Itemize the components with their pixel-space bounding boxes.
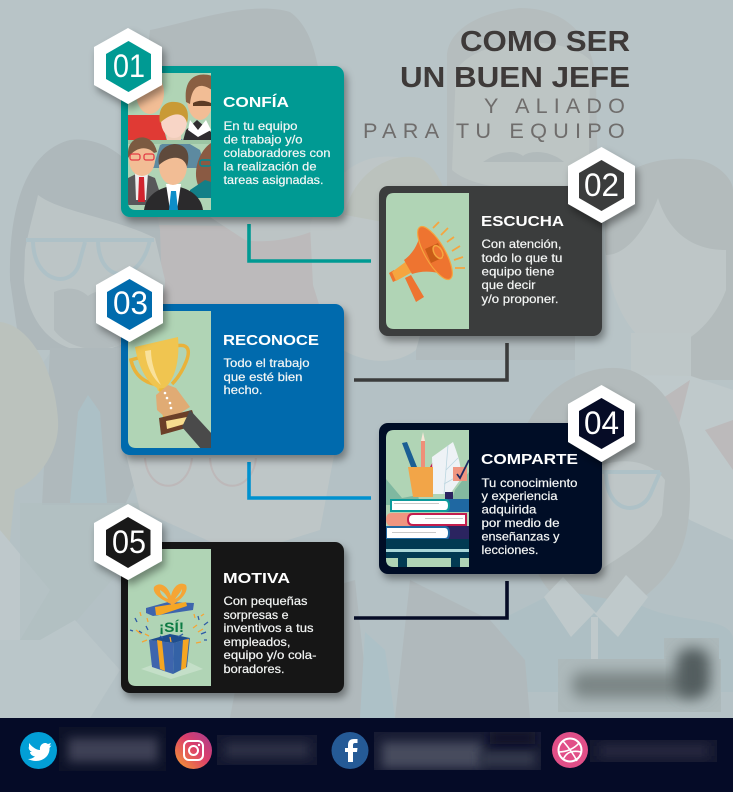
panel: 01 confía: la realización de [224,160,317,174]
title: COMO SER [460,26,630,58]
panel: 02 escucha [379,186,602,336]
blurred logo [558,638,721,712]
footer bar [0,718,733,792]
panel: 04 comparte [379,423,602,574]
blurred handle: instagram [217,735,317,765]
panel: 05 motiva: MOTIVA [223,570,290,587]
badge: 02: 02 [584,167,619,203]
panel: 02 escucha: ESCUCHA [481,213,564,230]
panel: 02 escucha: equipo tiene [482,264,555,278]
badge: 05 [94,504,162,580]
blurred handle: twitter [59,727,166,771]
panel: 05 motiva: empleados, [224,635,290,649]
icon: instagram [175,732,212,769]
panel: 05 motiva: sorpresas e [224,608,289,622]
panel: 04 comparte: Tu conocimiento [482,476,578,490]
panel: 03 reconoce [121,304,344,455]
title: PARA TU EQUIPO [363,120,631,143]
panel: 04 comparte: adquirida [482,502,537,516]
panel: 01 confía: colaboradores con [224,146,330,160]
illustration: gift box [128,549,211,686]
panel: 01 confía: CONFÍA [223,94,289,111]
badge: 04 [568,385,635,462]
illustration: books and pencils [386,430,469,567]
icon: facebook [332,732,368,769]
title [363,26,631,143]
illustration: trophy in hand [128,311,212,450]
panel: 03 reconoce: hecho. [224,383,262,397]
panel: 02 escucha: Con atención, [482,237,562,251]
panel: 04 comparte: lecciones. [482,543,538,557]
panel: 05 motiva: boradores. [224,662,284,676]
badge: 01 [94,28,162,104]
badge: 03 [96,266,163,342]
title: UN BUEN JEFE [400,62,630,94]
connector: 01 to 02 [249,224,371,261]
panel: 02 escucha: y/o proponer. [482,292,558,306]
panel: 01 confía: En tu equipo [224,119,298,133]
panel: 01 confía [121,66,344,217]
blurred handle: facebook [374,732,541,770]
panel: 05 motiva: equipo y/o cola- [224,648,316,662]
badge: 03: 03 [113,285,148,321]
panel: 04 comparte: por medio de [482,516,560,530]
panel: 05 motiva [121,542,344,693]
connector: 02 to 03 [354,343,507,380]
panel: 05 motiva: inventivos a tus [224,621,314,635]
illustration: team of people [126,72,213,210]
badge: 02 [568,147,635,223]
illustration: megaphone [386,193,469,329]
panel: 02 escucha: que decir [482,278,536,292]
panel: 03 reconoce: Todo el trabajo [224,356,310,370]
connector: 03 to 04 [249,462,371,498]
illustration: gift box: ¡SÍ! [159,619,184,635]
panel: 04 comparte: y experiencia [482,489,558,503]
icon: dribbble [552,732,588,768]
badge: 04: 04 [584,405,619,441]
panel: 02 escucha: todo lo que tu [482,251,562,265]
icon: twitter [20,732,57,769]
panel: 01 confía: tareas asignadas. [224,173,324,187]
panel: 05 motiva: Con pequeñas [224,594,308,608]
badge: 01: 01 [113,48,145,84]
title: Y ALIADO [484,95,631,118]
panel: 01 confía: de trabajo y/o [224,132,303,146]
panel: 03 reconoce: que esté bien [224,370,302,384]
panel: 04 comparte: COMPARTE [481,451,578,468]
panel: 03 reconoce: RECONOCE [223,332,319,349]
badge: 05: 05 [112,524,146,560]
connector: 04 to 05 [354,581,507,618]
blurred handle: dribbble [590,740,717,762]
panel: 04 comparte: enseñanzas y [482,530,560,544]
